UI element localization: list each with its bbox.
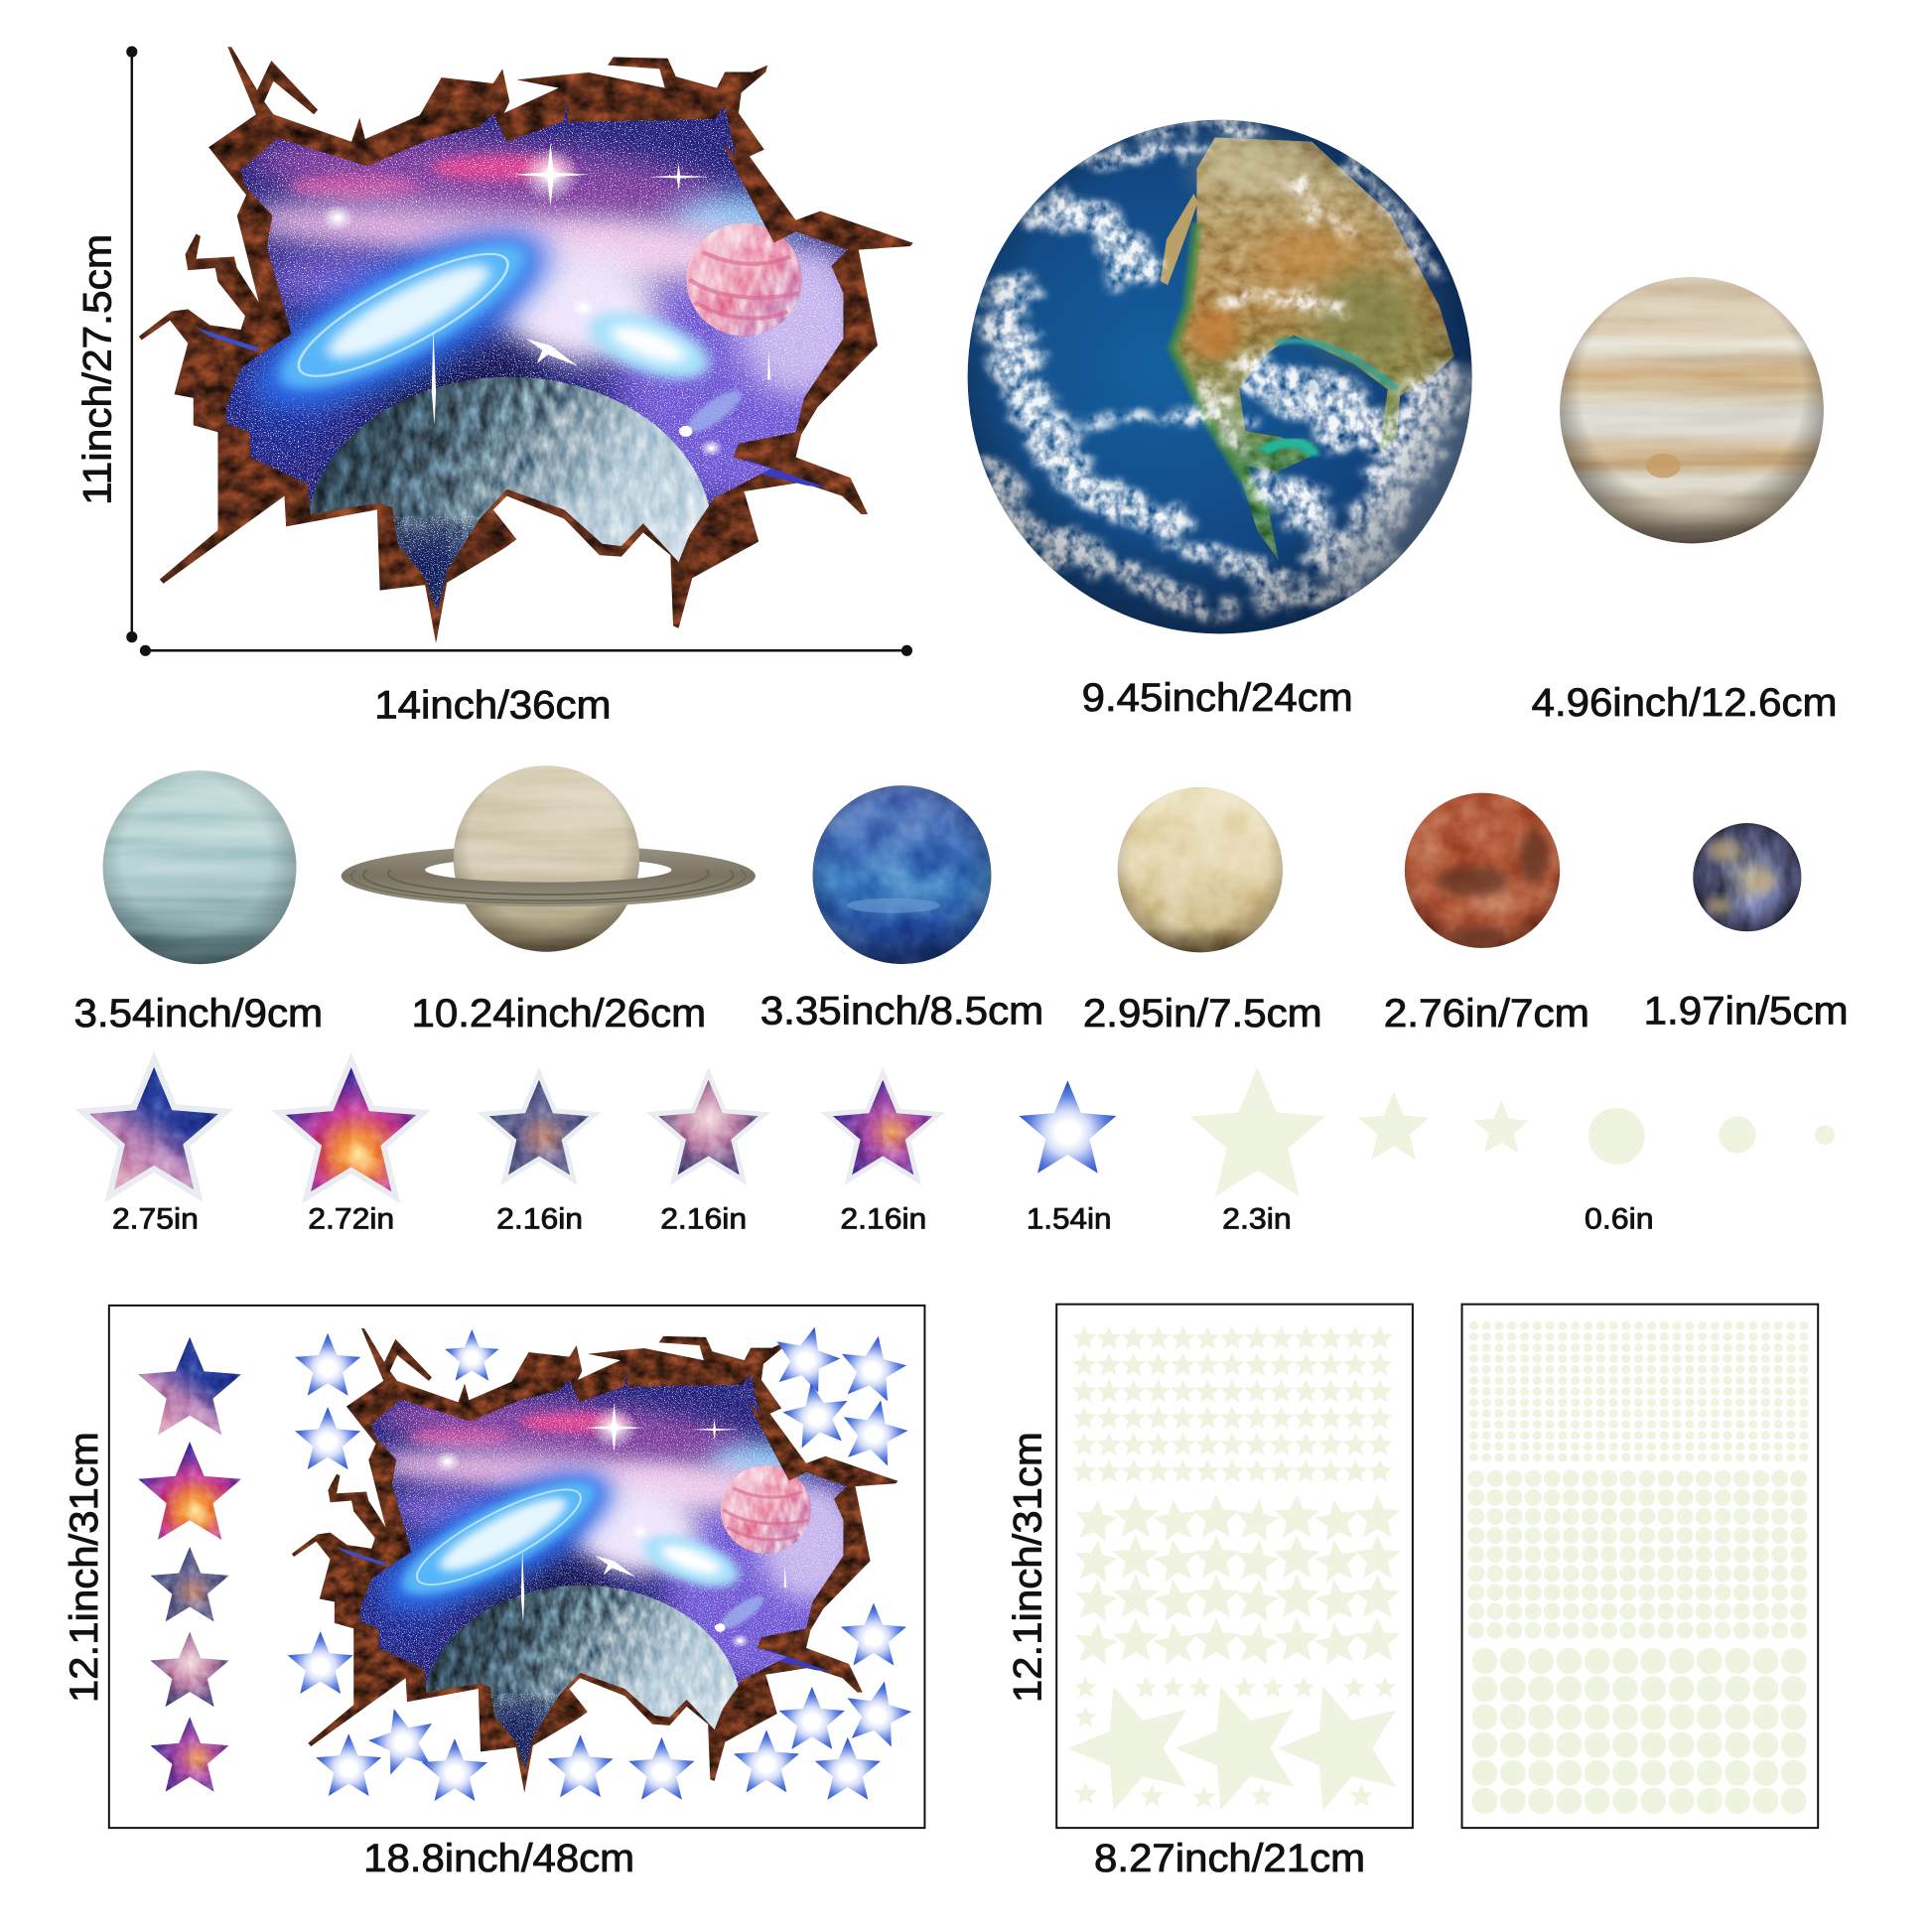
- panel: full decal sheet: [109, 1306, 924, 1831]
- star size labels: 2.75in: [112, 1202, 199, 1235]
- small stars grid: [1072, 1324, 1392, 1484]
- star size labels: 0.6in: [1585, 1202, 1654, 1235]
- tiny dots grid: [1467, 1320, 1810, 1462]
- planet: Mars: [1405, 793, 1560, 948]
- artwork: sheet crack galaxy: [292, 1328, 898, 1831]
- label: Mars: 2.76in/7cm: [1384, 992, 1589, 1035]
- galaxy stars column: [138, 1337, 241, 1792]
- medium stars grid: [1071, 1494, 1400, 1666]
- star size labels: 2.16in: [660, 1202, 747, 1235]
- label: glow star sheet width: 8.27inch/21cm: [1094, 1837, 1365, 1880]
- blue stars: [288, 1318, 916, 1801]
- panel: glow dots sheet: [1462, 1305, 1818, 1828]
- label: Jupiter: 4.96inch/12.6cm: [1532, 681, 1837, 725]
- panel: glow star sheet: [1056, 1305, 1413, 1828]
- star size labels: 2.3in: [1222, 1202, 1292, 1235]
- label: Neptune: 3.35inch/8.5cm: [760, 989, 1043, 1033]
- large dots grid: [1470, 1647, 1808, 1815]
- planet: Neptune: [812, 785, 991, 964]
- label: Saturn: 10.24inch/26cm: [412, 992, 706, 1035]
- planet: Jupiter: [1560, 277, 1824, 543]
- label: Venus: 2.95in/7.5cm: [1083, 992, 1322, 1035]
- star row: [74, 1051, 1835, 1204]
- label: Earth: 9.45inch/24cm: [1082, 676, 1353, 720]
- label: width: 14inch/36cm: [374, 684, 612, 728]
- dimension arrow: width: [140, 645, 912, 656]
- glow stars and dots: [1189, 1067, 1835, 1196]
- artwork: wall crack galaxy: [139, 47, 913, 693]
- star 2.16in A: [477, 1067, 602, 1185]
- planet: Venus: [1118, 787, 1283, 952]
- label: glow star sheet height: 12.1inch/31cm: [1007, 1432, 1050, 1703]
- label: Mercury: 1.97in/5cm: [1644, 989, 1849, 1033]
- planet: Saturn: [342, 765, 756, 952]
- label: Uranus: 3.54inch/9cm: [73, 992, 323, 1035]
- planet: Mercury: [1693, 823, 1801, 931]
- star 2.75in: [74, 1051, 233, 1202]
- star size labels: 2.16in: [840, 1202, 926, 1235]
- large stars: [1068, 1687, 1396, 1811]
- label: sheet width: 18.8inch/48cm: [363, 1837, 634, 1880]
- planet: Uranus: [103, 770, 296, 964]
- star 2.16in B: [646, 1067, 770, 1185]
- star size labels: [112, 1202, 1654, 1235]
- star 2.16in C: [821, 1067, 945, 1185]
- panel: wall crack galaxy decal with dimensions: [76, 47, 913, 728]
- star size labels: 1.54in: [1027, 1202, 1111, 1235]
- star 2.72in: [271, 1052, 431, 1204]
- medium dots grid: [1466, 1469, 1808, 1640]
- tiny scattered stars: [1074, 1676, 1396, 1808]
- label: height: 11inch/27.5cm: [76, 234, 120, 505]
- dimension arrow: height: [126, 47, 137, 642]
- planet: Earth: [954, 114, 1488, 639]
- star size labels: 2.16in: [496, 1202, 583, 1235]
- label: sheet height: 12.1inch/31cm: [63, 1432, 106, 1703]
- star size labels: 2.72in: [308, 1202, 394, 1235]
- star 1.54in blue: [1019, 1080, 1116, 1173]
